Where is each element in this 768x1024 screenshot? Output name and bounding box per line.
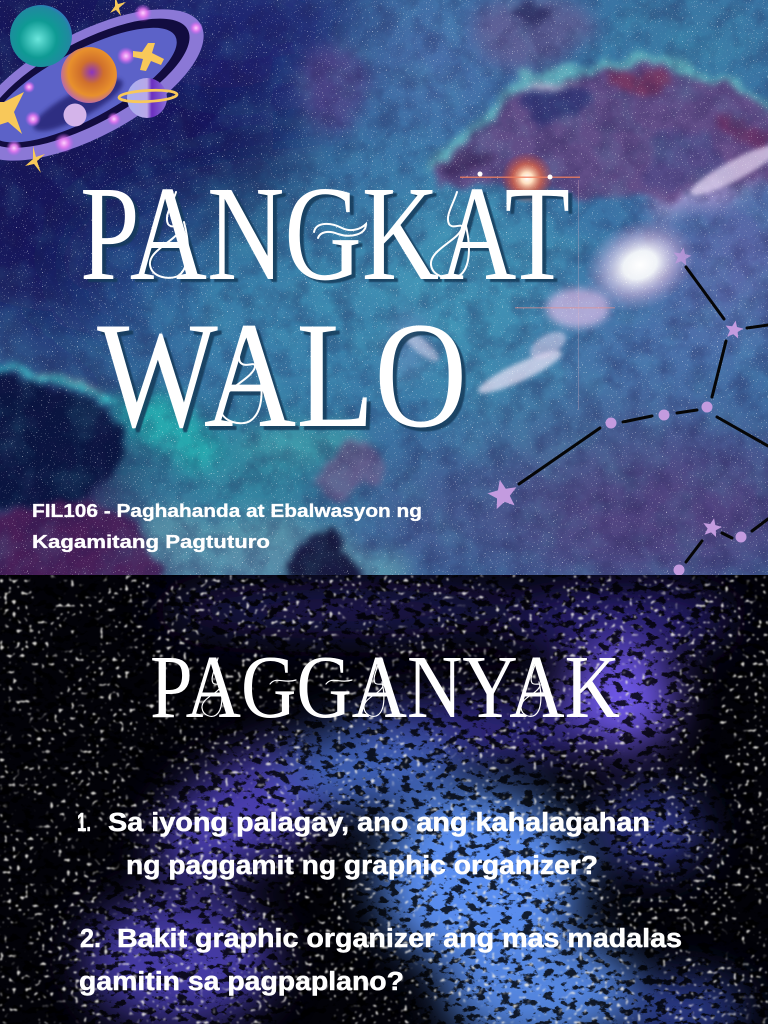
icon: small moon (64, 104, 86, 126)
nebula background (0, 0, 768, 595)
subtitle: FIL106 - Paghahanda at Ebalwasyon ng (32, 500, 422, 521)
title shadow: PANGKAT WALO: WALO (101, 295, 471, 463)
icon: ringed galaxy with planets (0, 0, 204, 173)
constellation nodes (485, 246, 746, 576)
title shadow: PANGKAT WALO (86, 192, 573, 433)
question 1: Sa iyong palagay, ano ang kahalagahan (108, 809, 650, 837)
spiral galaxy (541, 220, 693, 333)
icon: orange planet (61, 47, 117, 103)
ring glows (6, 4, 203, 156)
title: PANGKAT WALO: PANGKAT (80, 159, 570, 309)
starry background (0, 575, 768, 1024)
soft nebula clouds (106, 0, 768, 590)
bright star flare (460, 152, 615, 410)
subtitle (32, 500, 422, 552)
heading: PAGGANYAK (152, 657, 620, 718)
icon: gold stars (0, 0, 164, 173)
panel: starry question section (0, 575, 768, 1024)
panel: nebula cover (0, 0, 768, 595)
question 2: Bakit graphic organizer ang mas madalas (117, 925, 682, 953)
galaxy ring (0, 9, 204, 161)
heading: PAGGANYAK: PAGGANYAK (150, 638, 620, 737)
title: PANGKAT WALO: WALO (97, 291, 467, 459)
broad colour fields (0, 0, 768, 595)
white star clusters (397, 138, 768, 400)
question 2 (79, 925, 682, 996)
icon: teal planet (10, 5, 72, 67)
subtitle: Kagamitang Pagtuturo (32, 531, 270, 552)
constellation (485, 246, 768, 576)
question 2: 2. (80, 925, 101, 953)
icon: ringed planet (119, 78, 177, 118)
question 1 (77, 809, 650, 880)
question 1: 1. (77, 809, 91, 837)
lower-left dark cloud (0, 372, 125, 507)
question 2: gamitin sa pagpaplano? (79, 968, 404, 996)
title shadow: PANGKAT WALO: PANGKAT (84, 162, 574, 312)
constellation lines (519, 267, 768, 562)
question 1: ng paggamit ng graphic organizer? (126, 852, 598, 880)
carina cloud ridge (0, 2, 768, 590)
title: PANGKAT WALO (83, 189, 568, 428)
